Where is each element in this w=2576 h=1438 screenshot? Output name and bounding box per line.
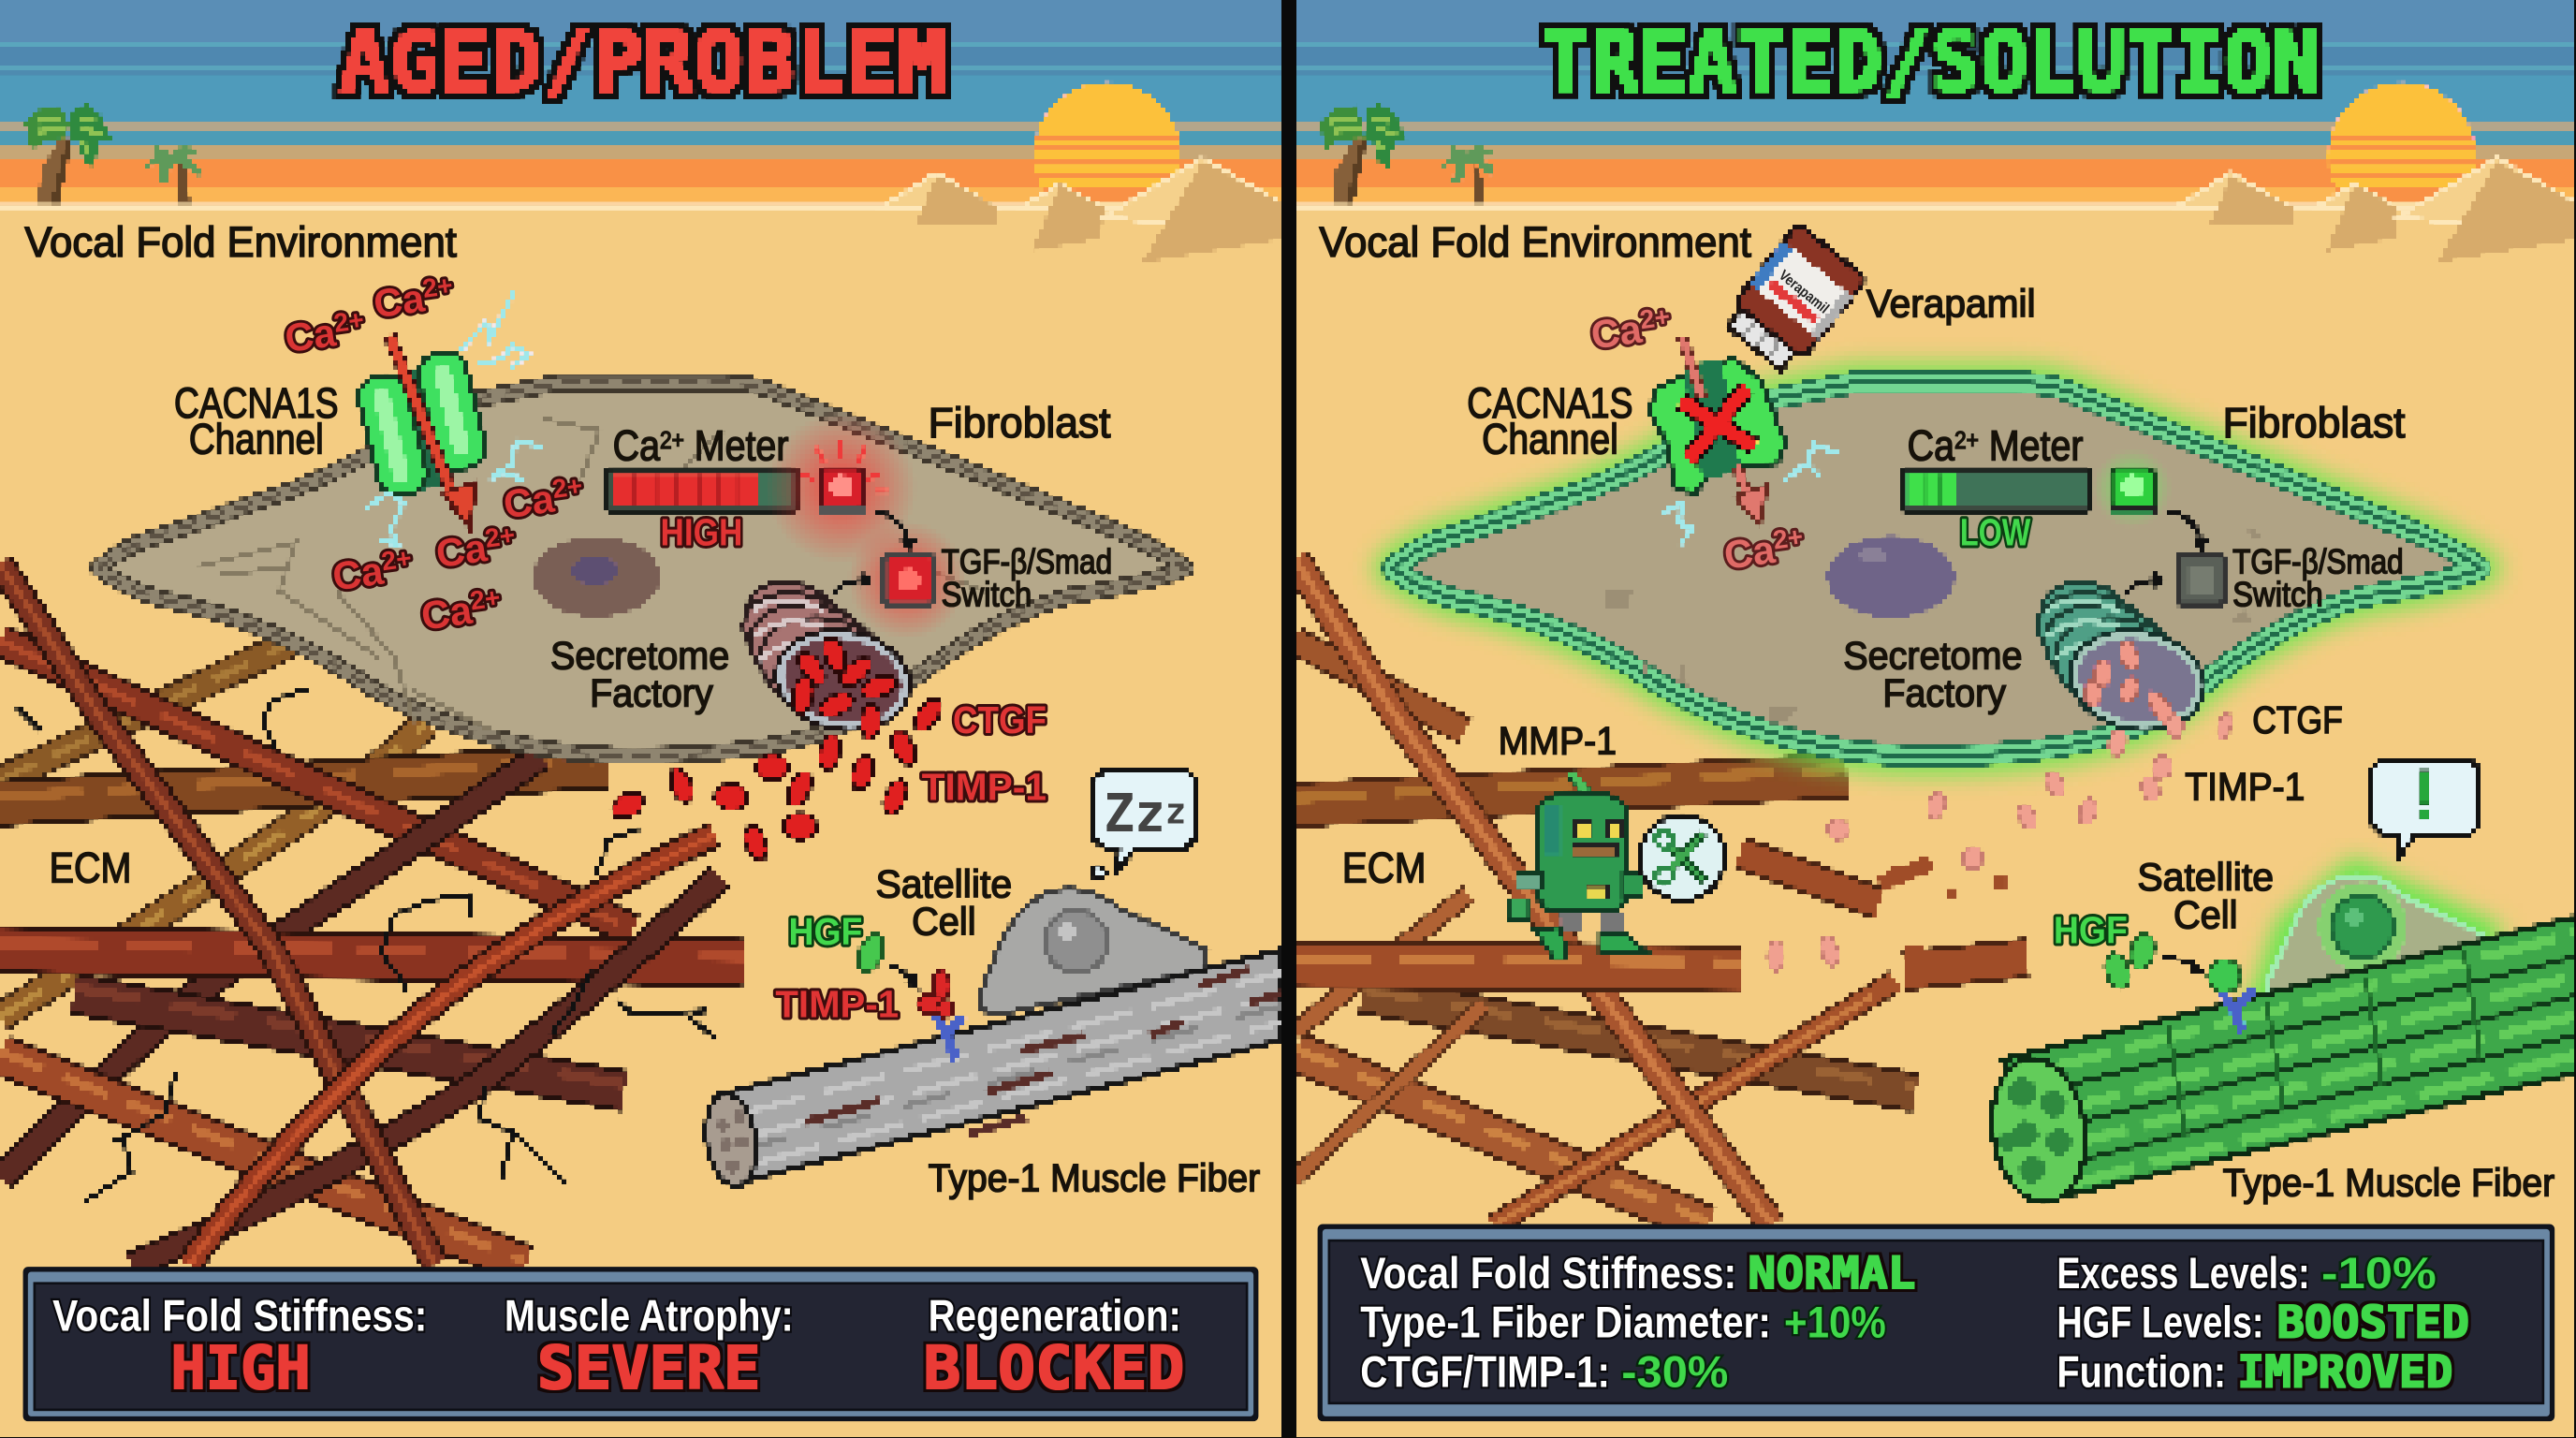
stat: function: Function: xyxy=(2056,1347,2226,1397)
label: calcium meter: Ca xyxy=(613,421,667,469)
label: factory: Factory xyxy=(590,671,713,715)
stat: atrophy: Muscle Atrophy: xyxy=(505,1292,794,1342)
background: desert sky and dunes xyxy=(0,0,1288,1438)
label: TIMP-1 at receptor: TIMP-1 xyxy=(775,982,899,1025)
ions: calcium: 2+ xyxy=(420,271,454,303)
stat: hgf xyxy=(2056,1298,2469,1349)
ions: calcium: Ca xyxy=(282,310,338,360)
fragments of ECM xyxy=(1893,868,2006,958)
stat: regeneration: Regeneration: xyxy=(929,1292,1181,1342)
verapamil bottle xyxy=(1720,224,1867,376)
ions: calcium: Ca xyxy=(501,476,557,526)
label: vocal fold environment: Vocal Fold Environment xyxy=(24,218,457,266)
secreted CTGF and TIMP-1 particles xyxy=(607,695,946,863)
label: verapamil: Verapamil xyxy=(1866,282,2036,326)
label: channel: CACNA1S xyxy=(1467,379,1633,427)
ions: calcium: 2+ xyxy=(380,543,414,576)
stat: stiffness: HIGH xyxy=(171,1333,311,1402)
secretome factory reduced xyxy=(2029,573,2212,741)
stat: regeneration xyxy=(923,1292,1184,1402)
type-1 muscle fiber restored xyxy=(1983,917,2576,1209)
stat: excess: -10% xyxy=(2321,1249,2437,1299)
type-1 muscle fiber atrophied xyxy=(700,949,1281,1189)
texts: treated labels xyxy=(1318,218,2554,1421)
label: vocal fold environment: Vocal Fold Environment xyxy=(1319,218,1751,266)
satellite cell dormant xyxy=(979,889,1208,1014)
label: calcium meter: 2+ xyxy=(1954,426,1979,454)
reduced secreted particles xyxy=(1767,712,2234,971)
fibroblast cell healthy with glow xyxy=(1393,383,2481,756)
label: secretome: Secretome xyxy=(1843,633,2023,677)
extracellular matrix: stiff cracked fibers xyxy=(0,564,742,1265)
ions: calcium reduced: 2+ xyxy=(1771,521,1805,555)
texts: aged labels xyxy=(23,218,1260,1421)
stat: function xyxy=(2056,1346,2452,1398)
label: CTGF: CTGF xyxy=(2252,698,2343,741)
label: fibroblast: Fibroblast xyxy=(929,399,1111,447)
secretome factory overactive xyxy=(735,573,917,741)
stat: atrophy: SEVERE xyxy=(537,1333,761,1402)
MMP-1 robot with scissors xyxy=(1508,772,1647,960)
stat: fiber diameter: Type-1 Fiber Diameter: xyxy=(1360,1299,1771,1348)
stat: stiffness: Vocal Fold Stiffness: xyxy=(52,1292,427,1342)
stat: excess: Excess Levels: xyxy=(2056,1249,2310,1299)
ions: calcium: Ca xyxy=(433,525,490,576)
stat: hgf: BOOSTED xyxy=(2277,1298,2469,1349)
scissors bubble xyxy=(1640,815,1725,901)
panel: treated status xyxy=(1318,1225,2554,1421)
speech bubble: alert xyxy=(2372,759,2479,858)
ions: calcium xyxy=(282,271,586,638)
illustration: aged scene xyxy=(0,0,1288,1438)
fibroblast nucleus xyxy=(1827,536,1955,618)
label: switch: TGF-β/Smad xyxy=(2232,543,2404,581)
ions: calcium: 2+ xyxy=(468,582,502,615)
stat: function: IMPROVED xyxy=(2237,1346,2452,1398)
label: muscle fiber: Type-1 Muscle Fiber xyxy=(929,1155,1260,1199)
label: cell: Cell xyxy=(2174,893,2237,937)
ions: calcium reduced: Ca xyxy=(1721,527,1778,578)
label: satellite: Satellite xyxy=(2137,855,2274,899)
label: channel second line: Channel xyxy=(1482,415,1618,462)
stat: hgf: HGF Levels: xyxy=(2056,1299,2264,1348)
fibroblast nucleus xyxy=(533,536,661,617)
label: channel second line: Channel xyxy=(189,415,324,462)
label: HGF: HGF xyxy=(788,910,862,953)
stat: stiffness xyxy=(52,1292,427,1402)
label: channel: CACNA1S xyxy=(174,379,339,427)
stat: regeneration: BLOCKED xyxy=(923,1333,1184,1402)
panel: treated solution xyxy=(1295,0,2576,1438)
stat: stiffness: Vocal Fold Stiffness: xyxy=(1360,1249,1736,1299)
HGF blocked by TIMP-1 at receptor xyxy=(853,931,962,1060)
ions: calcium: 2+ xyxy=(550,471,584,504)
ions: calcium: Ca xyxy=(371,275,427,326)
stat: stiffness: NORMAL xyxy=(1748,1248,1915,1299)
label: muscle fiber: Type-1 Muscle Fiber xyxy=(2223,1161,2554,1205)
label: zzz: z xyxy=(1165,790,1186,832)
stat: ctgf timp: CTGF/TIMP-1: xyxy=(1360,1347,1610,1397)
alarm light xyxy=(766,413,916,564)
indicator light green xyxy=(2093,448,2172,527)
ions: calcium: 2+ xyxy=(483,521,517,553)
CACNA1S channel blocked xyxy=(1647,337,1786,526)
label: switch second line: Switch xyxy=(942,576,1032,614)
label: bottle tag: Verapamil xyxy=(1776,268,1832,317)
divider xyxy=(1281,0,1295,1438)
background: desert sky and dunes xyxy=(1295,0,2576,1438)
fibroblast cell xyxy=(98,383,1186,756)
label: satellite: Satellite xyxy=(875,861,1012,905)
ions: calcium reduced: 2+ xyxy=(1638,301,1672,334)
panel: aged status xyxy=(23,1267,1258,1421)
label: fibroblast: Fibroblast xyxy=(2223,399,2406,447)
title: treated solution: TREATED/SOLUTION xyxy=(1542,13,2320,111)
stat: fiber diameter: +10% xyxy=(1784,1299,1886,1348)
label: factory: Factory xyxy=(1882,671,2006,715)
label: low: LOW xyxy=(1960,511,2031,554)
TGF switch active xyxy=(831,511,966,639)
label: high: HIGH xyxy=(661,511,742,554)
label: ECM: ECM xyxy=(50,844,131,891)
label: zzz: Zz xyxy=(1104,784,1167,844)
ion sparks xyxy=(1662,444,1837,546)
ions: calcium: Ca xyxy=(418,588,475,638)
speech bubble: asleep xyxy=(1092,770,1196,879)
label: calcium meter: 2+ xyxy=(660,426,684,454)
label: CTGF: CTGF xyxy=(953,698,1046,741)
stat: atrophy xyxy=(505,1292,794,1402)
panel: aged problem xyxy=(0,0,1288,1438)
CACNA1S channel open xyxy=(354,335,490,529)
ion sparks xyxy=(365,292,542,546)
label: TIMP-1: TIMP-1 xyxy=(922,766,1046,809)
HGF binding receptor xyxy=(2100,931,2254,1032)
ions: calcium reduced xyxy=(1588,301,1807,578)
label: TIMP-1: TIMP-1 xyxy=(2185,765,2305,809)
ions: calcium reduced: Ca xyxy=(1588,307,1645,358)
ions: calcium: 2+ xyxy=(332,305,366,338)
label: cell: Cell xyxy=(912,900,976,944)
label: MMP-1: MMP-1 xyxy=(1499,719,1617,763)
label: switch: TGF-β/Smad xyxy=(942,543,1112,581)
red X block mark xyxy=(1680,388,1754,460)
calcium meter low xyxy=(1901,468,2091,511)
TGF switch inactive xyxy=(2124,511,2224,605)
ions: calcium: Ca xyxy=(329,549,386,599)
extracellular matrix: degraded fibers xyxy=(1295,559,2027,1225)
label: calcium meter: Meter xyxy=(1979,421,2083,469)
calcium meter high xyxy=(607,468,797,511)
illustration: treated scene xyxy=(1295,0,2576,1438)
label: calcium meter: Meter xyxy=(684,421,788,469)
satellite cell activated xyxy=(2265,875,2482,1003)
label: switch second line: Switch xyxy=(2232,576,2323,614)
label: calcium meter: Ca xyxy=(1908,421,1962,469)
label: HGF: HGF xyxy=(2054,908,2128,951)
label: ECM: ECM xyxy=(1342,844,1426,891)
stat: ctgf timp: -30% xyxy=(1621,1347,1728,1397)
title: aged problem: AGED/PROBLEM xyxy=(339,13,947,111)
label: secretome: Secretome xyxy=(550,633,729,677)
